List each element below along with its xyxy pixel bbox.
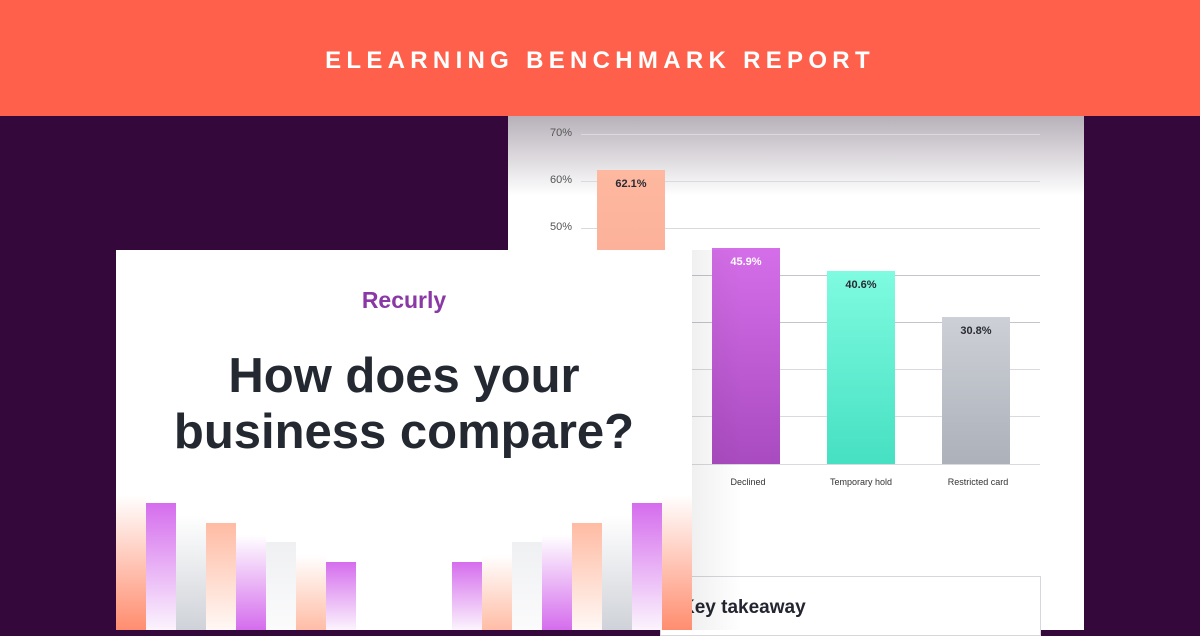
shadow strip [692,250,742,630]
text: Temporary hold [830,477,892,487]
text: 70% [550,127,572,139]
bar: Declined 45.9%: 45.9% [730,256,762,268]
panel: cover card [116,250,692,630]
key takeaway box [660,576,1041,636]
y axis labels [550,127,572,233]
title: ELEARNING BENCHMARK REPORT [325,47,875,74]
text: Restricted card [948,477,1008,487]
bar: Temporary hold 40.6% [827,271,895,464]
text: 60% [550,174,572,186]
bar: 62.1% [597,170,665,464]
panel: bar chart [508,116,1084,630]
headline: How does your [228,349,580,403]
bar: Restricted card 30.8% [942,317,1010,464]
logo: Recurly: Recurly [362,287,446,313]
bar: Temporary hold 40.6%: 40.6% [845,279,877,291]
key takeaway box: Key takeaway [681,597,806,618]
bar: 62.1%: 62.1% [615,178,647,190]
bar: Declined 45.9% [712,248,780,464]
bar: Restricted card 30.8%: 30.8% [960,325,992,337]
text: 50% [550,221,572,233]
category labels [730,477,1008,487]
headline [174,349,634,459]
header banner [0,0,1200,116]
text: Declined [730,477,766,487]
headline: business compare? [174,405,634,459]
decorative bars [116,503,692,630]
